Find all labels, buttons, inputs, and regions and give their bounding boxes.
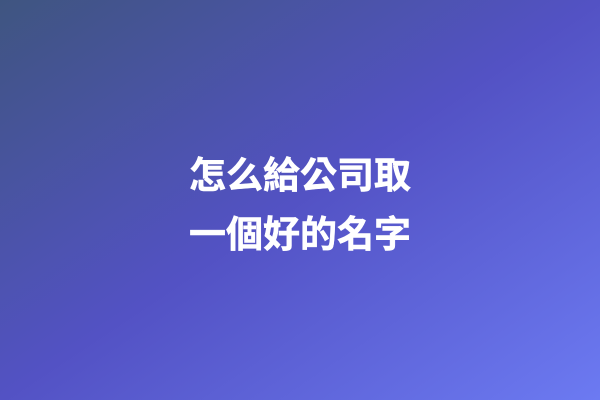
title (189, 155, 411, 255)
title: 怎么給公司取 (189, 155, 411, 196)
title: 一個好的名字 (189, 214, 411, 255)
